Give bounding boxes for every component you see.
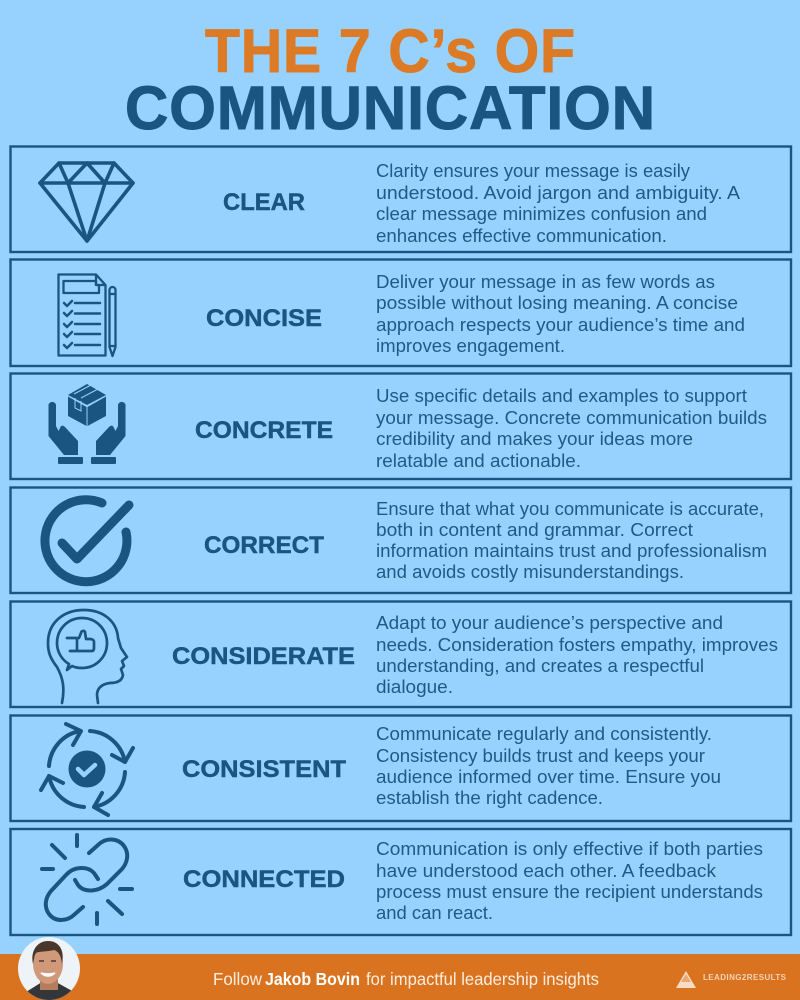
panel: connected [10,829,791,935]
title [125,17,656,142]
panel: correct [10,488,791,593]
text: correct description: and avoids costly misunderstandings. [376,561,684,582]
text: concrete description: Use specific details and examples to support [376,385,747,406]
heading: clear: CLEAR [223,189,305,216]
text: concise description: possible without losing meaning. A concise [376,292,738,313]
title: COMMUNICATION [125,74,656,142]
panel: concise [10,260,791,366]
avatar: portrait of Jakob Bovin [18,937,80,1000]
text: consistent description: establish the right cadence. [376,787,603,808]
footer band [0,954,800,1000]
text: concise description [376,271,745,356]
text: correct description: Ensure that what you communicate is accurate, [376,498,764,519]
text: consistent description: Consistency builds trust and keeps your [376,745,705,766]
text: correct description: information maintains trust and professionalism [376,540,767,561]
text: considerate description [376,612,778,697]
icon: head with thumbs up [48,610,127,703]
text: concrete description [376,385,767,471]
icon: checklist and pencil [58,274,116,356]
text: clear description [376,160,741,246]
text: considerate description: needs. Consideration fosters empathy, improves [376,634,778,655]
text: concrete description: relatable and actionable. [376,450,581,471]
text: connected description: have understood each other. A feedback [376,860,717,881]
text: concise description: approach respects your audience’s time and [376,314,745,335]
text: concrete description: your message. Concrete communication builds [376,407,767,428]
text: clear description: clear message minimizes confusion and [376,203,707,224]
heading: correct: CORRECT [204,532,324,559]
panel: concrete [10,374,791,479]
text: concrete description: credibility and makes your ideas more [376,428,693,449]
icon: cycle arrows with check [41,724,133,815]
text: connected description: Communication is only effective if both parties [376,838,763,859]
footer text: Follow [213,969,262,989]
icon: broken chain link [42,835,132,924]
logo: leading2results [676,971,787,988]
icon: hands holding a box [48,384,126,464]
footer text [213,969,599,989]
heading: concrete: CONCRETE [195,417,333,444]
text: clear description: enhances effective communication. [376,225,667,246]
text: correct description: both in content and grammar. Correct [376,519,693,540]
text: considerate description: understanding, and creates a respectful [376,655,704,676]
text: considerate description: dialogue. [376,676,453,697]
text: connected description: and can react. [376,902,493,923]
icon: check in circle [45,500,129,582]
text: correct description [376,498,767,582]
heading: consistent: CONSISTENT [182,756,346,783]
text: concise description: Deliver your message in as few words as [376,271,715,292]
icon: diamond [40,163,133,241]
footer text: Jakob Bovin [265,969,360,989]
title: THE 7 C’s OF [205,17,576,85]
heading: connected: CONNECTED [183,866,345,893]
heading: concise: CONCISE [206,305,322,332]
text: consistent description: audience informed over time. Ensure you [376,766,721,787]
heading: considerate: CONSIDERATE [172,643,355,670]
footer text: for impactful leadership insights [366,969,599,989]
text: consistent description [376,723,721,808]
text: connected description: process must ensure the recipient understands [376,881,763,902]
text: considerate description: Adapt to your audience’s perspective and [376,612,723,633]
text: clear description: understood. Avoid jargon and ambiguity. A [376,182,741,203]
logo: leading2results: LEADING2RESULTS [703,973,787,982]
text: clear description: Clarity ensures your message is easily [376,160,691,181]
panel: considerate [10,602,791,707]
text: concise description: improves engagement. [376,335,565,356]
panel: clear [10,146,791,252]
text: connected description [376,838,763,923]
panel: consistent [10,716,791,821]
text: consistent description: Communicate regularly and consistently. [376,723,712,744]
